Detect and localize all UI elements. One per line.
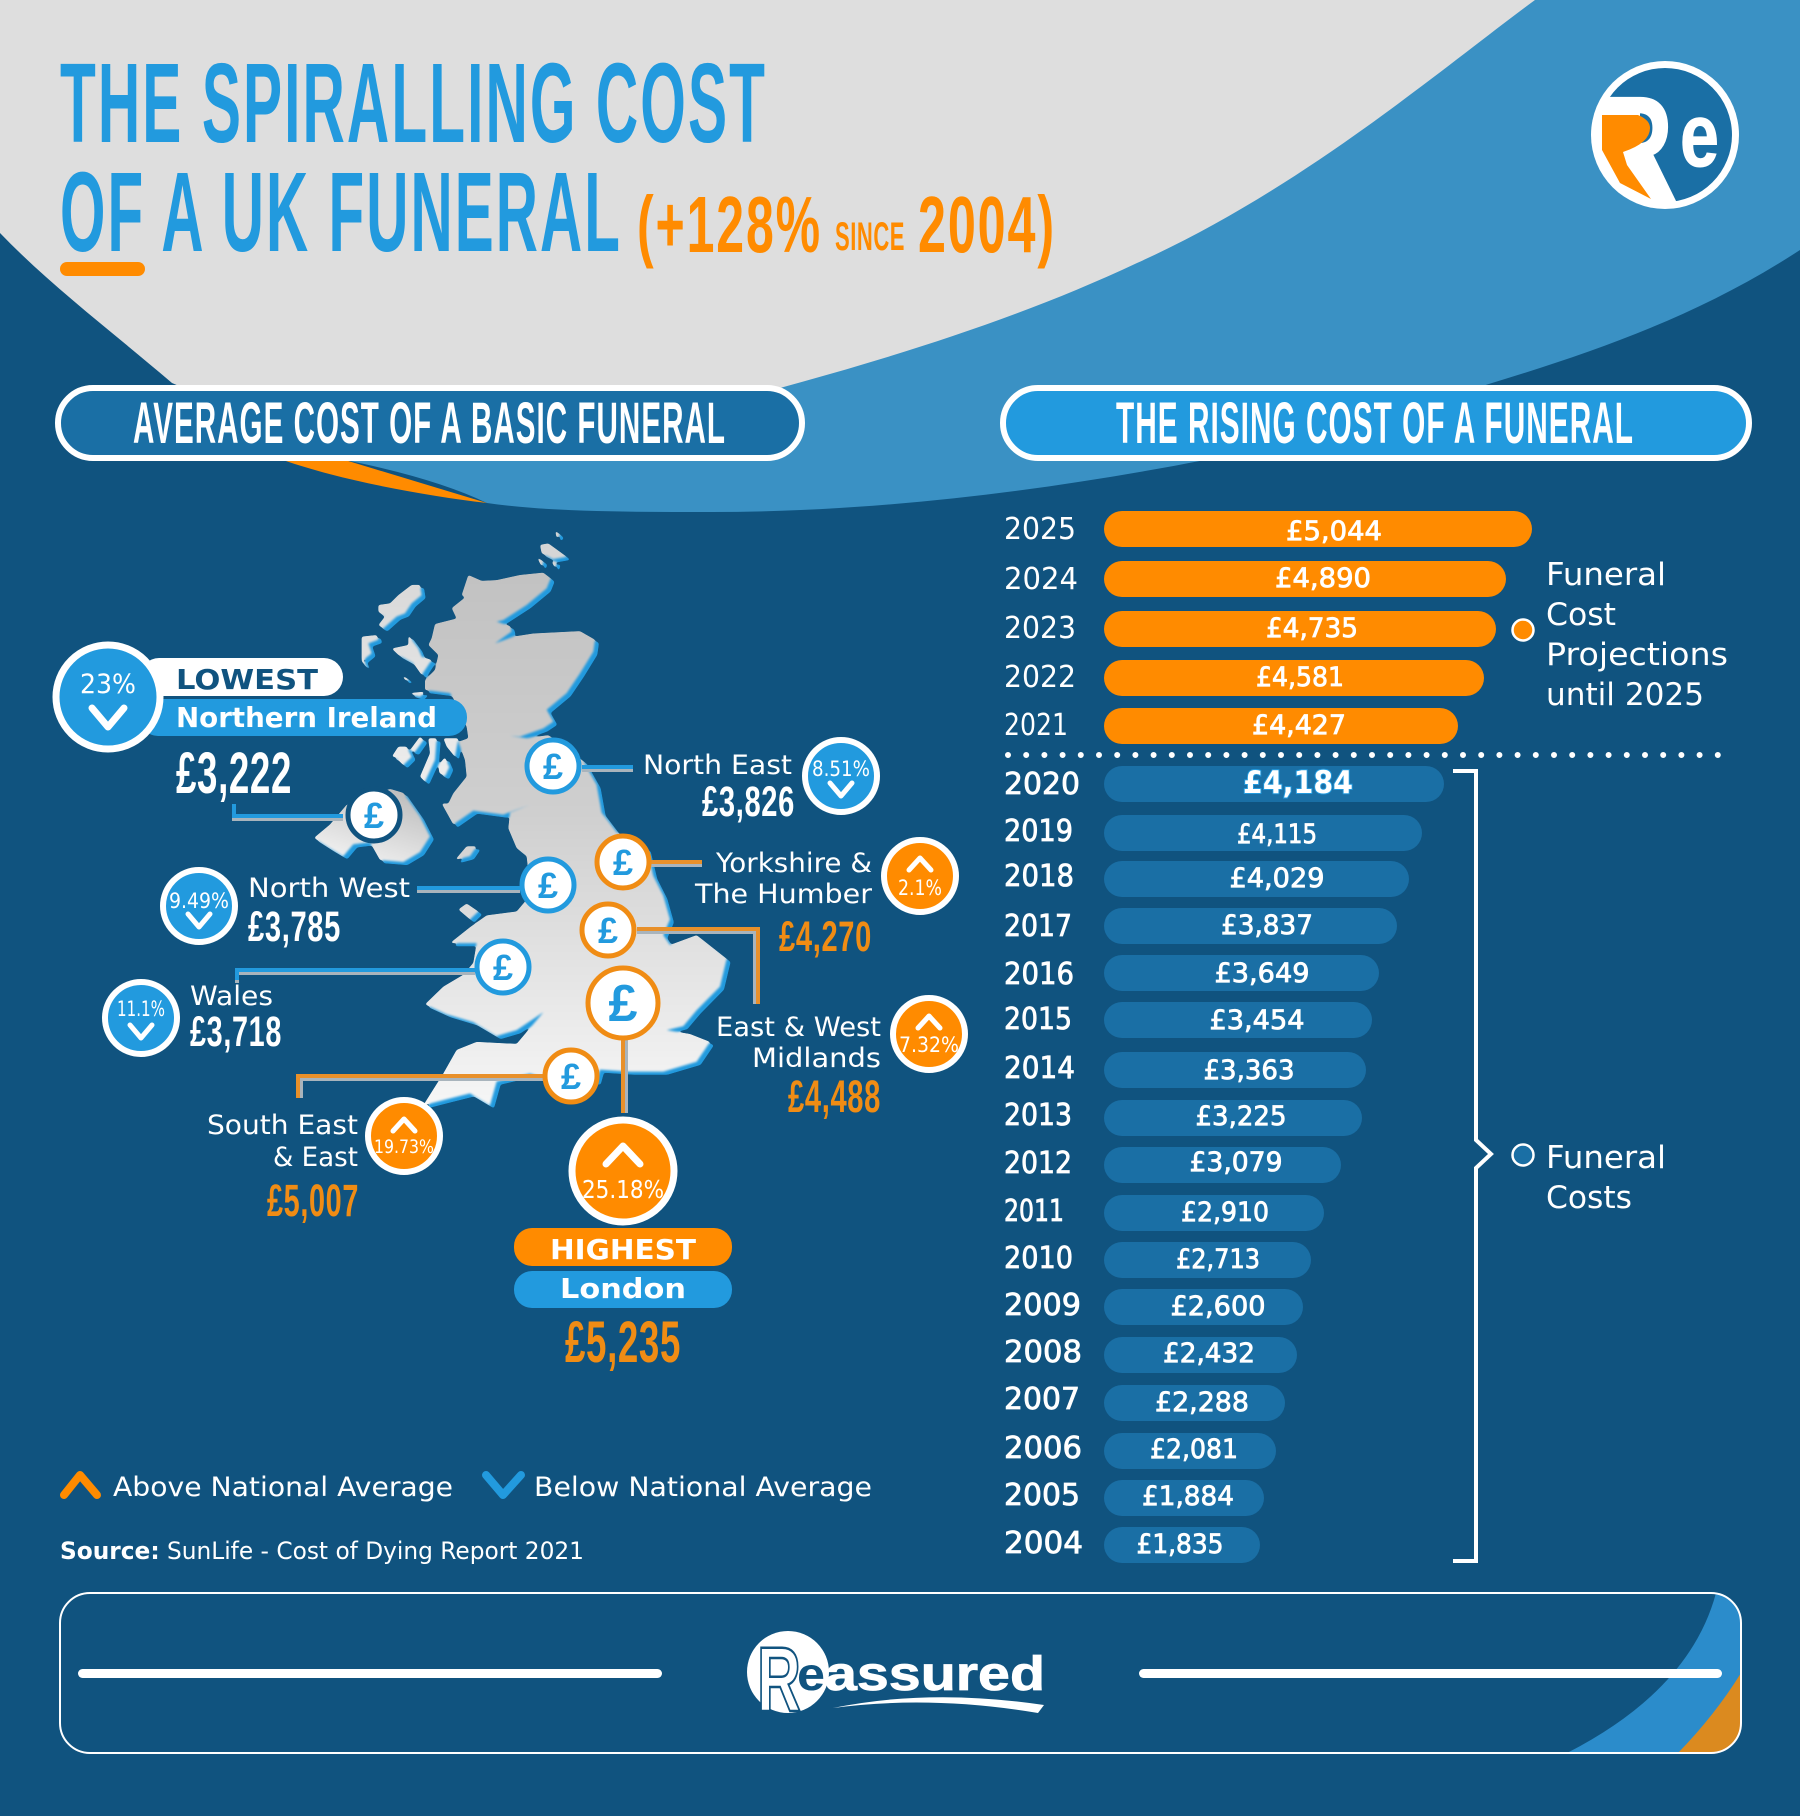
bar 2018: [1004, 859, 1409, 897]
bar 2008: 2008: [1004, 1335, 1082, 1370]
bar 2015: [1004, 1002, 1372, 1038]
logo: Re: R: [1596, 66, 1674, 230]
bar 2007: 2007: [1004, 1382, 1080, 1417]
header background: orange sliver: [283, 460, 487, 503]
bar 2024: [1004, 561, 1506, 597]
label: North East: North East: [643, 750, 792, 781]
bar 2025: £5,044: [1286, 516, 1382, 547]
legend: above national average: Above National Average: [113, 1472, 453, 1503]
bar 2018: 2018: [1004, 859, 1074, 894]
bar 2009: [1004, 1288, 1303, 1325]
bar 2021: [1004, 708, 1458, 744]
heading pill: average cost: [58, 388, 802, 458]
map pin: North East: [527, 740, 579, 792]
bar 2011: £2,910: [1181, 1197, 1269, 1228]
map pin: North West: £: [538, 865, 558, 906]
bar 2007: £2,288: [1155, 1387, 1249, 1418]
callout: lowest Northern Ireland: [56, 645, 467, 806]
bar 2011: [1004, 1194, 1324, 1231]
callout: highest London: £5,235: [565, 1310, 681, 1375]
bracket: [1453, 771, 1491, 1561]
bar 2025: 2025: [1004, 512, 1076, 547]
bar chart: funeral costs by year: [1004, 511, 1532, 1563]
bar 2022: [1004, 660, 1484, 696]
map pin: North East: £: [543, 746, 563, 787]
bar 2016: £3,649: [1214, 958, 1310, 989]
map pin: London: [588, 968, 658, 1038]
bar 2014: 2014: [1004, 1051, 1075, 1086]
bar 2009: £2,600: [1170, 1291, 1266, 1322]
legend: below national average: Below National Average: [534, 1472, 872, 1503]
bar 2004: £1,835: [1136, 1529, 1224, 1560]
bar 2011: 2011: [1004, 1194, 1064, 1229]
map pin: South East: £: [561, 1056, 581, 1097]
bar 2013: [1004, 1098, 1362, 1136]
connector lines: [234, 767, 758, 1113]
legend: funeral cost projections: Cost: [1546, 597, 1616, 633]
title: THE SPIRALLING COST: [60, 40, 767, 166]
legend: funeral cost projections: Projections: [1546, 637, 1728, 673]
bar 2004: [1004, 1526, 1260, 1563]
bar 2009: 2009: [1004, 1288, 1081, 1323]
logo: Re: [1591, 61, 1739, 209]
UK map: [314, 530, 731, 1108]
label: North West: North West: [248, 873, 410, 904]
bar 2006: 2006: [1004, 1431, 1082, 1466]
footer panel: [60, 1593, 1745, 1753]
legend: funeral cost projections: [1512, 557, 1728, 713]
heading pill: average cost: AVERAGE COST OF A BASIC FUNERAL: [133, 391, 726, 456]
map pin: Northern Ireland: £: [364, 795, 384, 836]
label: Yorkshire and The Humber: [694, 840, 956, 961]
bar 2022: £4,581: [1256, 662, 1344, 693]
bar 2023: [1004, 611, 1496, 647]
legend: funeral costs: Funeral: [1546, 1140, 1666, 1176]
bar 2021: £4,427: [1252, 710, 1346, 741]
label: Yorkshire and The Humber: 2.1%: [898, 876, 942, 900]
map pin: Northern Ireland: [348, 789, 400, 841]
legend: funeral cost projections: until 2025: [1546, 677, 1704, 713]
label: South East and East: & East: [273, 1142, 358, 1173]
title: (+128%: [637, 180, 822, 269]
header background: mid blue swoosh: [345, 0, 1800, 512]
bar 2019: £4,115: [1237, 819, 1317, 850]
bar 2006: [1004, 1431, 1276, 1469]
callout: highest London: London: [560, 1272, 686, 1305]
bar 2010: [1004, 1241, 1311, 1278]
bar 2024: 2024: [1004, 562, 1078, 597]
map pin: Yorkshire: [597, 836, 649, 888]
title: OF A UK FUNERAL: [60, 149, 622, 275]
bar 2012: [1004, 1146, 1341, 1183]
bar 2017: [1004, 908, 1397, 944]
title: SINCE: [835, 215, 905, 259]
label: Wales: £3,718: [190, 1008, 282, 1056]
label: Wales: 11.1%: [117, 997, 165, 1021]
bar 2007: [1004, 1382, 1285, 1421]
map pin: Yorkshire: £: [613, 842, 633, 883]
label: North West: [163, 870, 410, 951]
source: Source: SunLife - Cost of Dying Report 2021: [60, 1537, 584, 1565]
label: East and West Midlands: [716, 998, 965, 1122]
label: South East and East: South East: [207, 1110, 358, 1141]
footer logo: Reassured: assured: [825, 1648, 1045, 1701]
bar 2018: £4,029: [1230, 863, 1324, 894]
bar 2014: £3,363: [1204, 1055, 1294, 1086]
bar 2023: £4,735: [1266, 613, 1358, 644]
bar 2025: [1004, 511, 1532, 547]
bar 2012: £3,079: [1190, 1147, 1282, 1178]
bar 2006: £2,081: [1150, 1434, 1238, 1465]
bar 2013: 2013: [1004, 1098, 1072, 1133]
label: Yorkshire and The Humber: Yorkshire &: [715, 848, 872, 879]
bar 2015: £3,454: [1210, 1005, 1304, 1036]
bar 2017: 2017: [1004, 909, 1072, 944]
bar 2008: [1004, 1335, 1297, 1373]
logo: Re: e: [1680, 86, 1719, 186]
label: East and West Midlands: 7.32%: [899, 1033, 959, 1057]
bar 2016: 2016: [1004, 957, 1074, 992]
bar 2012: 2012: [1004, 1146, 1072, 1181]
map pin: London: £: [609, 975, 638, 1033]
bar 2015: 2015: [1004, 1002, 1072, 1037]
footer logo: Reassured: [747, 1629, 1045, 1731]
label: South East and East: [207, 1100, 440, 1226]
label: North East: £3,826: [702, 778, 795, 826]
map pin: Wales: [477, 941, 529, 993]
legend: funeral cost projections: Funeral: [1546, 557, 1666, 593]
map pin: Midlands: £: [598, 910, 618, 951]
legend: funeral costs: [1512, 1140, 1666, 1216]
label: South East and East: £5,007: [267, 1175, 359, 1226]
bar 2022: 2022: [1004, 660, 1076, 695]
bar 2014: [1004, 1051, 1366, 1088]
bar 2021: 2021: [1004, 708, 1068, 743]
bar 2019: 2019: [1004, 814, 1073, 849]
bar 2010: £2,713: [1176, 1244, 1260, 1275]
callout: highest London: [514, 1120, 732, 1375]
label: North West: £3,785: [248, 903, 341, 951]
bar 2005: [1004, 1478, 1264, 1516]
bar 2004: 2004: [1004, 1526, 1083, 1561]
callout: highest London: 25.18%: [582, 1175, 664, 1204]
label: North East: [643, 740, 877, 826]
map pin: South East: [545, 1050, 597, 1102]
bar 2020: £4,184: [1243, 765, 1353, 801]
bar 2023: 2023: [1004, 611, 1076, 646]
bar 2005: 2005: [1004, 1478, 1080, 1513]
callout: lowest Northern Ireland: Northern Ireland: [176, 701, 437, 734]
map pin: Midlands: [582, 904, 634, 956]
label: Wales: Wales: [190, 981, 273, 1012]
bar 2008: £2,432: [1163, 1338, 1255, 1369]
bar 2019: [1004, 814, 1422, 851]
label: Yorkshire and The Humber: £4,270: [779, 913, 872, 961]
bar 2010: 2010: [1004, 1241, 1073, 1276]
footer logo: Reassured: R: [757, 1629, 801, 1731]
label: Yorkshire and The Humber: The Humber: [694, 879, 873, 910]
footer logo: Reassured: e: [797, 1648, 825, 1700]
legend: funeral costs: Costs: [1546, 1180, 1632, 1216]
label: East and West Midlands: Midlands: [752, 1043, 881, 1074]
bar 2020: [1004, 765, 1444, 802]
bar 2024: £4,890: [1275, 563, 1371, 594]
label: East and West Midlands: £4,488: [788, 1071, 881, 1122]
title: 2004): [918, 180, 1056, 269]
title: [60, 40, 1056, 275]
label: North West: 9.49%: [169, 889, 229, 913]
bar 2016: [1004, 955, 1379, 992]
bar 2020: 2020: [1004, 767, 1080, 802]
title underline: [60, 262, 145, 276]
callout: lowest Northern Ireland: 23%: [80, 669, 136, 700]
callout: lowest Northern Ireland: LOWEST: [176, 663, 318, 696]
callout: lowest Northern Ireland: £3,222: [176, 741, 292, 806]
label: Wales: [105, 981, 282, 1056]
header background: grey curve: [0, 0, 1535, 458]
callout: highest London: HIGHEST: [550, 1233, 696, 1266]
map pin: Wales: £: [493, 947, 513, 988]
bar 2017: £3,837: [1221, 910, 1313, 941]
bar 2013: £3,225: [1196, 1101, 1286, 1132]
label: East and West Midlands: East & West: [716, 1012, 881, 1043]
bar 2005: £1,884: [1142, 1481, 1234, 1512]
map pin: North West: [522, 859, 574, 911]
label: North East: 8.51%: [812, 757, 870, 781]
label: South East and East: 19.73%: [374, 1136, 434, 1158]
